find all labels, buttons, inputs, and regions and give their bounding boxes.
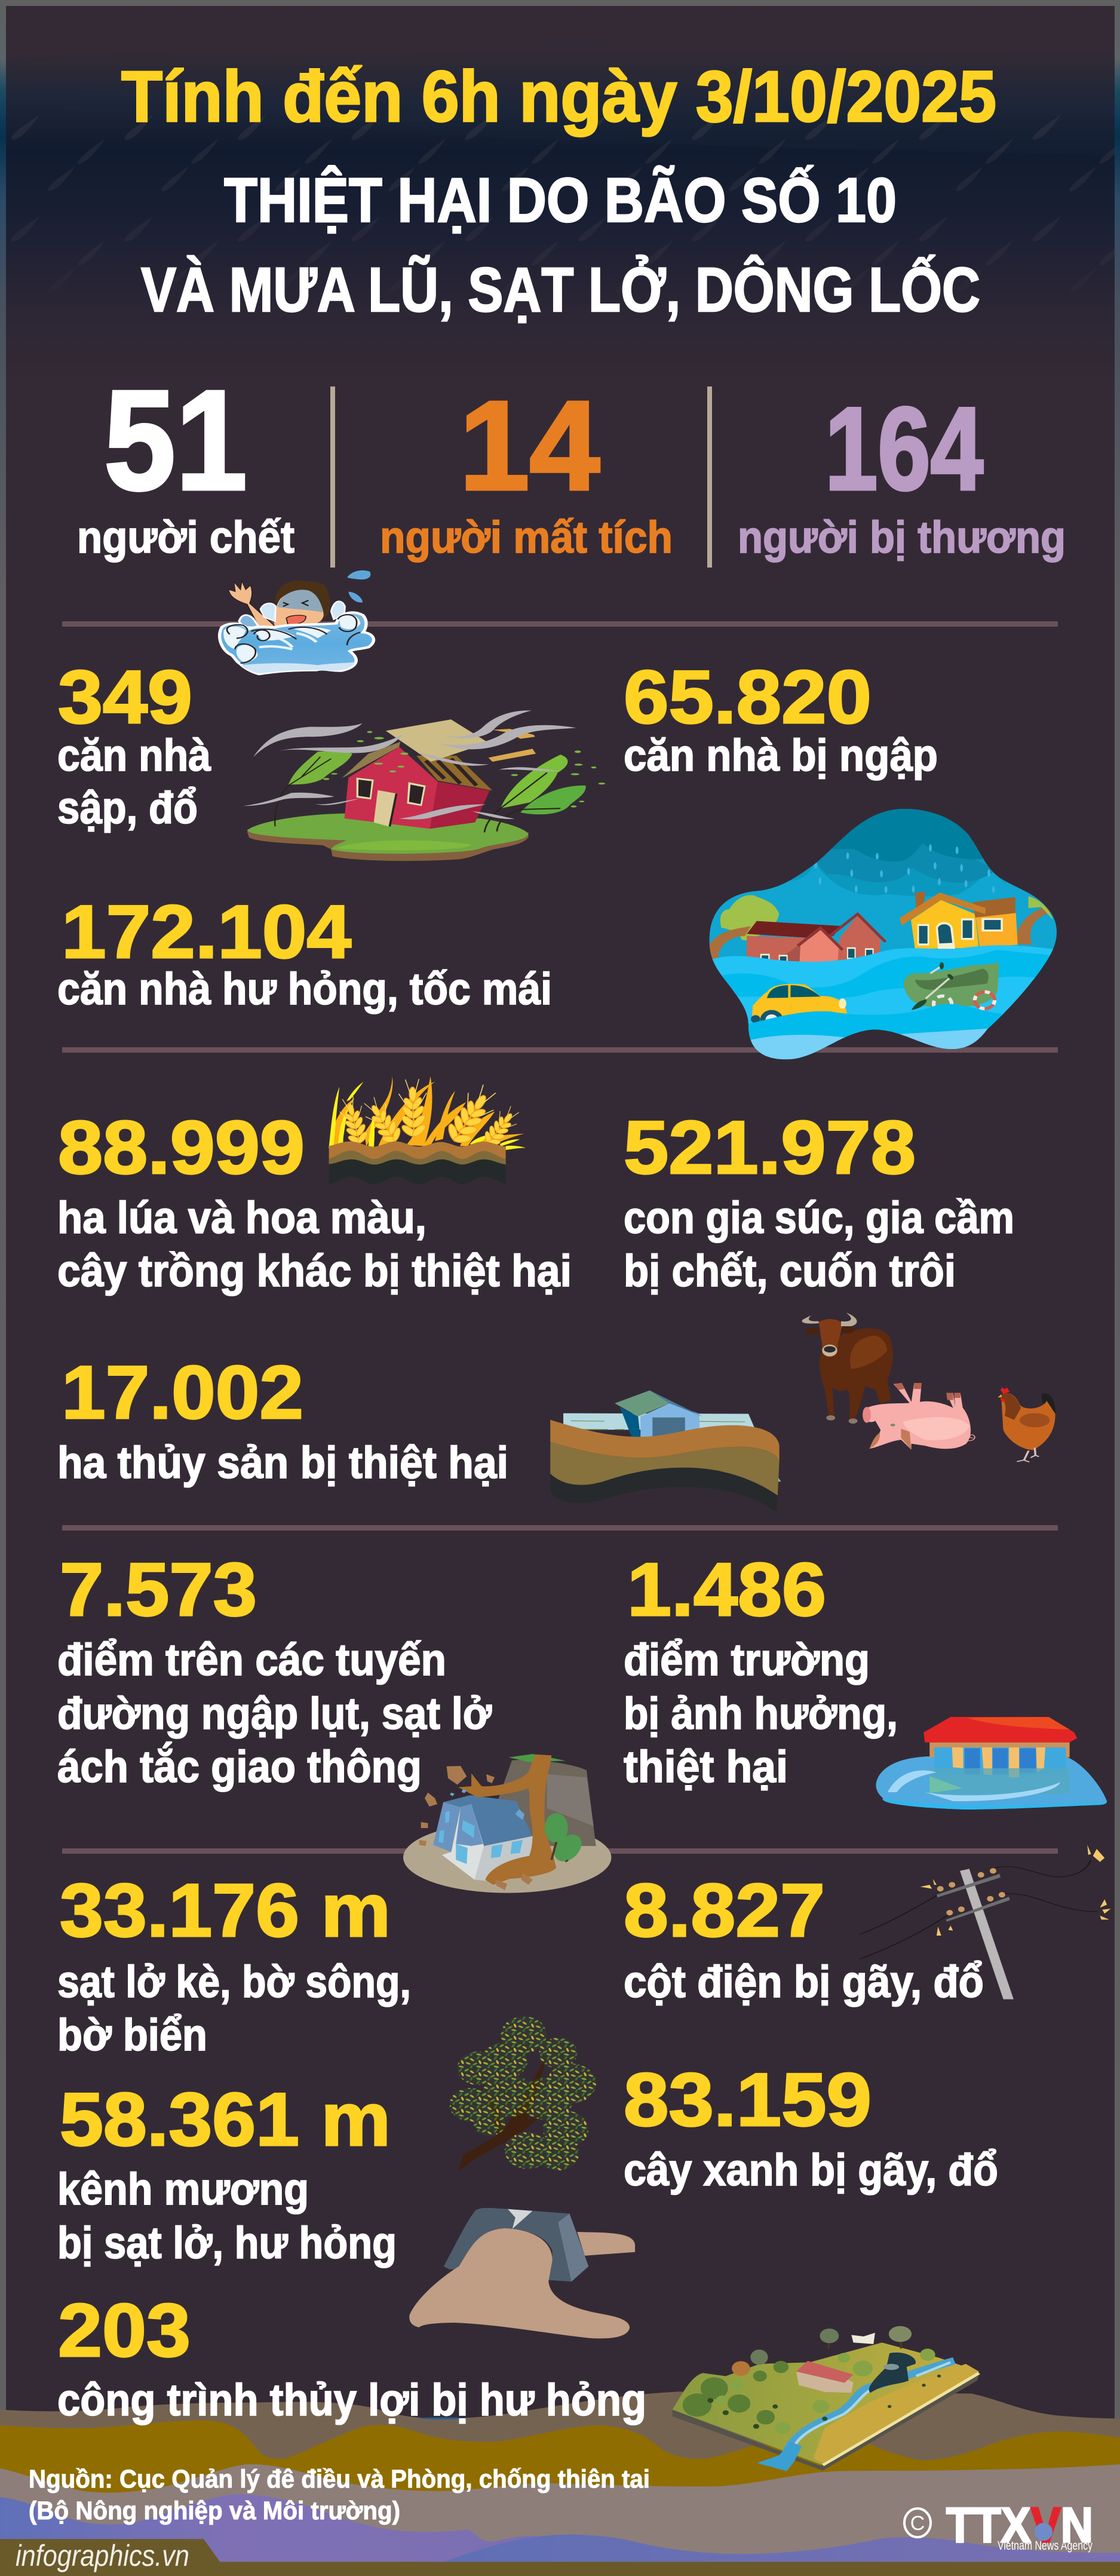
icon: collapsed culvert bbox=[409, 2208, 635, 2338]
stat: injured: người bị thương bbox=[738, 512, 1066, 562]
website label: infographics.vn bbox=[16, 2539, 189, 2572]
stat: flooded houses bbox=[624, 655, 938, 780]
stat: power poles bbox=[624, 1868, 984, 2007]
stat: livestock bbox=[624, 1105, 1014, 1296]
stat: riverbank: bờ biển bbox=[57, 2010, 207, 2060]
stat: livestock: bị chết, cuốn trôi bbox=[624, 1246, 956, 1296]
icon: landslide bbox=[403, 1754, 611, 1893]
stat: aquaculture bbox=[57, 1350, 508, 1488]
source note: Nguồn: Cục Quản lý đê điều và Phòng, chống thiên tai bbox=[29, 2465, 650, 2494]
heading: title bbox=[141, 165, 980, 325]
stat: riverbank bbox=[57, 1868, 411, 2060]
stat: missing: 14 bbox=[459, 375, 600, 516]
stat: schools: 1.486 bbox=[627, 1547, 826, 1632]
stat: road points: điểm trên các tuyến bbox=[57, 1634, 446, 1685]
stat: damaged houses: 172.104 bbox=[62, 890, 351, 974]
stat: road points: 7.573 bbox=[60, 1547, 257, 1632]
logo: TTXVN: TTXVN bbox=[946, 2497, 1093, 2553]
stat: deaths: người chết bbox=[77, 512, 294, 562]
heading: date: Tính đến 6h ngày 3/10/2025 bbox=[121, 56, 996, 137]
icon: house in storm bbox=[243, 710, 605, 861]
stat: schools: bị ảnh hưởng, bbox=[624, 1688, 898, 1738]
stat: aquaculture: ha thủy sản bị thiệt hại bbox=[57, 1437, 508, 1488]
stat: road points: đường ngập lụt, sạt lở bbox=[57, 1688, 492, 1738]
stat: livestock: con gia súc, gia cầm bbox=[624, 1192, 1014, 1243]
icon: flooded fish farm bbox=[550, 1390, 781, 1513]
stat: canals: kênh mương bbox=[57, 2164, 309, 2214]
stat: irrigation works bbox=[57, 2288, 646, 2425]
stat: crops damaged: cây trồng khác bị thiệt hại bbox=[57, 1246, 572, 1296]
logo: TTXVN: C bbox=[910, 2512, 925, 2535]
stat: aquaculture: 17.002 bbox=[62, 1350, 303, 1434]
stat: riverbank: sạt lở kè, bờ sông, bbox=[57, 1956, 411, 2007]
stat: collapsed houses: sập, đổ bbox=[57, 783, 198, 833]
footer landscape bbox=[0, 2391, 1120, 2576]
stat: livestock: 521.978 bbox=[624, 1105, 916, 1189]
stat: damaged houses bbox=[57, 890, 552, 1014]
stat: power poles: 8.827 bbox=[624, 1868, 825, 1952]
stat: road points bbox=[57, 1547, 492, 1792]
heading: title: THIỆT HẠI DO BÃO SỐ 10 bbox=[224, 165, 897, 235]
stat: canals: bị sạt lở, hư hỏng bbox=[57, 2218, 397, 2268]
stat: canals bbox=[57, 2077, 397, 2268]
icon: broken power pole bbox=[860, 1845, 1110, 2000]
stat: injured bbox=[738, 383, 1066, 562]
stat: trees: cây xanh bị gãy, đổ bbox=[624, 2145, 998, 2195]
stat: flooded houses: căn nhà bị ngập bbox=[624, 730, 938, 780]
stat: irrigation works: công trình thủy lợi bị hư hỏng bbox=[57, 2375, 646, 2425]
stat: collapsed houses bbox=[57, 655, 211, 833]
icon: rice field bbox=[329, 1077, 526, 1185]
stormy sky with rain bbox=[6, 68, 1115, 312]
stat: trees: 83.159 bbox=[624, 2057, 872, 2142]
source note bbox=[29, 2465, 650, 2525]
stat: missing bbox=[380, 375, 673, 562]
stat: road points: ách tắc giao thông bbox=[57, 1741, 422, 1792]
icon: flooded school bbox=[876, 1717, 1107, 1810]
stat: crops damaged: ha lúa và hoa màu, bbox=[57, 1192, 426, 1243]
stat: riverbank: 33.176 m bbox=[60, 1868, 391, 1952]
stat: crops damaged: 88.999 bbox=[58, 1105, 305, 1189]
stat: deaths bbox=[77, 361, 294, 562]
icon: fallen tree bbox=[449, 2016, 596, 2172]
icon: cow, pig, chicken bbox=[802, 1312, 1055, 1462]
stat: deaths: 51 bbox=[104, 361, 247, 520]
stat: schools: điểm trường bbox=[624, 1634, 870, 1685]
stat: damaged houses: căn nhà hư hỏng, tốc mái bbox=[57, 964, 552, 1014]
stat: power poles: cột điện bị gãy, đổ bbox=[624, 1956, 984, 2007]
stat: missing: người mất tích bbox=[380, 512, 673, 562]
icon: irrigation model bbox=[673, 2326, 979, 2471]
source note: (Bộ Nông nghiệp và Môi trường) bbox=[29, 2497, 400, 2525]
stat: injured: 164 bbox=[825, 383, 983, 514]
heading: title: VÀ MƯA LŨ, SẠT LỞ, DÔNG LỐC bbox=[141, 254, 980, 325]
stat: canals: 58.361 m bbox=[60, 2077, 391, 2161]
stat: collapsed houses: 349 bbox=[58, 655, 192, 739]
stat: crops damaged bbox=[57, 1105, 572, 1296]
icon: flooded town bbox=[710, 809, 1057, 1060]
logo: TTXVN: Vietnam News Agency bbox=[998, 2539, 1093, 2553]
stat: schools bbox=[624, 1547, 898, 1792]
stat: schools: thiệt hại bbox=[624, 1741, 788, 1792]
stat: flooded houses: 65.820 bbox=[624, 655, 872, 739]
stat: trees bbox=[624, 2057, 998, 2195]
icon: drowning person bbox=[220, 571, 374, 674]
stat: collapsed houses: căn nhà bbox=[57, 730, 211, 780]
stat: irrigation works: 203 bbox=[58, 2288, 191, 2372]
